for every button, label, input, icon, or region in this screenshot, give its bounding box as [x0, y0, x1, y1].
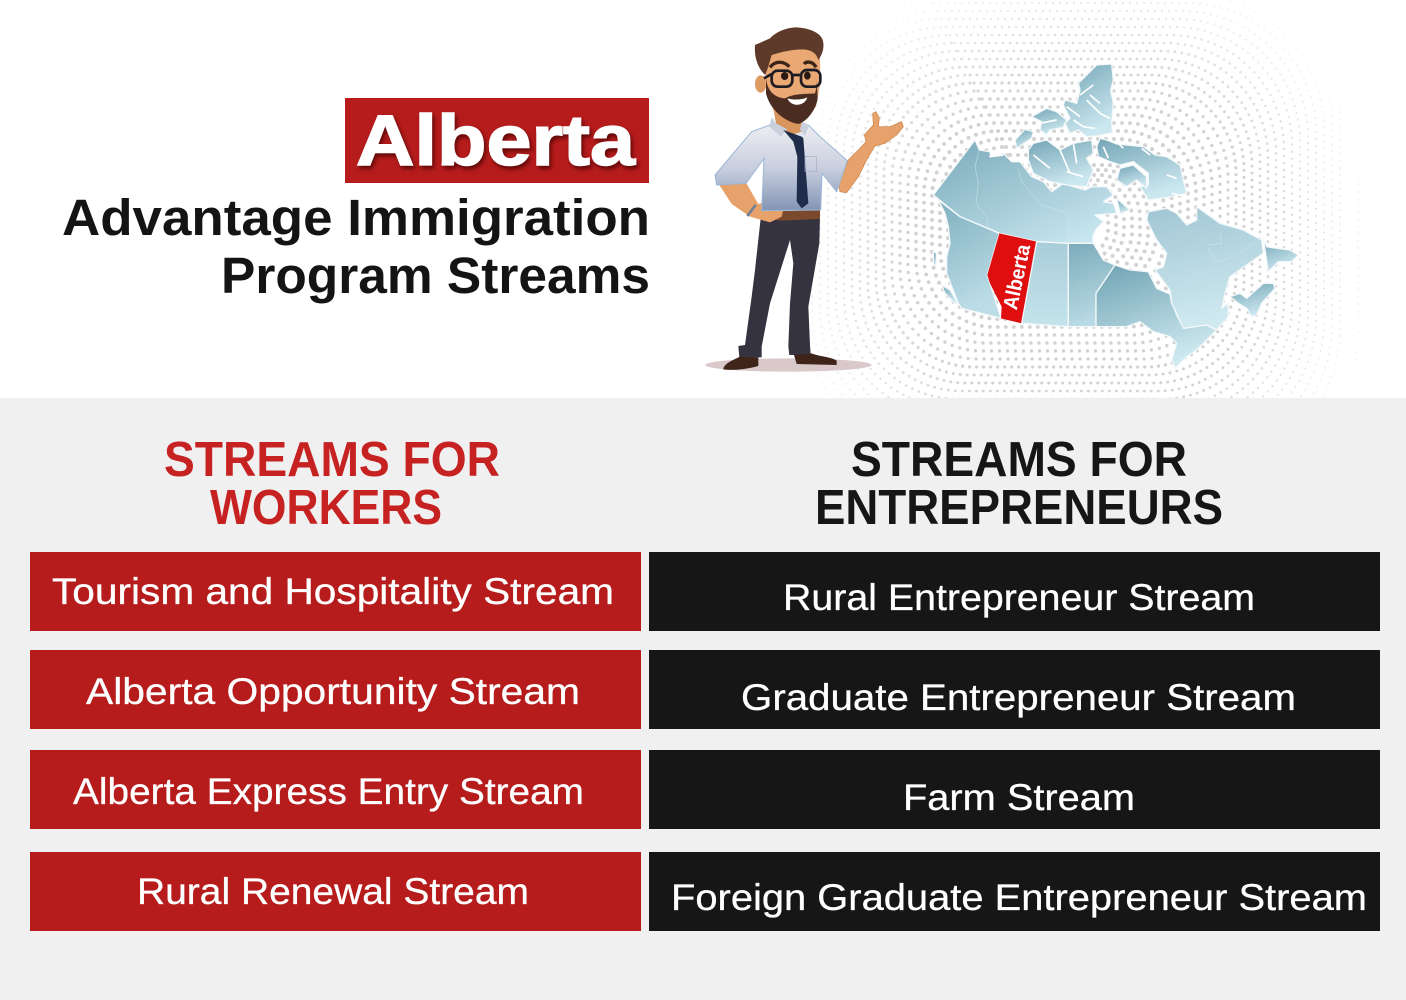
shirt pocket	[805, 157, 817, 172]
halftone dot rings behind the map	[811, 0, 1359, 398]
ear	[755, 75, 766, 93]
row: Alberta Express Entry Stream	[30, 750, 641, 829]
necktie	[783, 130, 808, 208]
row: Alberta Opportunity Stream: Alberta Opportunity Stream	[86, 671, 580, 712]
header background	[0, 0, 1406, 398]
row: Farm Stream	[649, 750, 1380, 829]
beard	[766, 78, 818, 124]
Baffin Island	[1097, 138, 1187, 200]
row: Tourism and Hospitality Stream: Tourism and Hospitality Stream	[52, 571, 614, 612]
row: Graduate Entrepreneur Stream: Graduate Entrepreneur Stream	[741, 677, 1296, 718]
lower grey panel	[0, 398, 1406, 1000]
Melville Peninsula	[1117, 165, 1147, 188]
Manitoba	[1068, 243, 1115, 327]
subtitle line 1: Advantage Immigration	[62, 189, 650, 246]
neck	[773, 108, 802, 135]
eyebrows	[770, 62, 816, 67]
heading: streams for workers	[164, 433, 500, 535]
Banks Island	[1015, 129, 1033, 148]
British Columbia	[938, 200, 1001, 318]
Saskatchewan	[1022, 242, 1068, 327]
bracelet	[747, 205, 756, 216]
column: streams for workers	[30, 433, 641, 931]
left forearm and hand on hip	[719, 183, 784, 222]
column: streams for entrepreneurs	[649, 433, 1380, 931]
row: Alberta Opportunity Stream	[30, 650, 641, 729]
ground shadow	[705, 358, 872, 372]
Alberta province	[987, 233, 1037, 323]
heading: streams for entrepreneurs: ENTREPRENEURS	[815, 481, 1223, 535]
shirt	[715, 125, 847, 211]
eyes	[781, 72, 811, 80]
raised arm and open hand	[838, 112, 903, 193]
smile	[787, 97, 807, 105]
title block	[62, 98, 650, 304]
Ellesmere and northern islands	[1063, 64, 1113, 137]
Vancouver Island	[942, 285, 958, 303]
row: Alberta Express Entry Stream: Alberta Express Entry Stream	[73, 771, 584, 812]
row: Foreign Graduate Entrepreneur Stream	[649, 852, 1380, 931]
row: Rural Renewal Stream: Rural Renewal Stream	[137, 871, 529, 912]
Haida Gwaii	[933, 252, 937, 267]
shoes	[723, 353, 837, 370]
heading: streams for entrepreneurs: STREAMS FOR	[851, 433, 1187, 487]
Alberta map label: Alberta	[999, 242, 1035, 312]
cartoon man presenting the map	[705, 27, 903, 372]
belt	[762, 210, 820, 221]
hair	[755, 27, 823, 75]
row: Tourism and Hospitality Stream	[30, 552, 641, 631]
heading: streams for workers: WORKERS	[210, 481, 442, 535]
territories	[933, 140, 1117, 243]
Southampton Island	[1117, 198, 1130, 213]
row: Graduate Entrepreneur Stream	[649, 650, 1380, 729]
collar	[769, 117, 809, 137]
Maritimes	[1230, 283, 1275, 317]
row: Farm Stream: Farm Stream	[903, 777, 1135, 818]
row: Rural Entrepreneur Stream: Rural Entrepreneur Stream	[783, 577, 1255, 618]
map of Canada with Alberta highlighted	[933, 64, 1298, 368]
heading: streams for entrepreneurs	[815, 433, 1223, 535]
Queen Elizabeth Islands	[1032, 108, 1067, 135]
subtitle line 2: Program Streams	[221, 247, 650, 304]
glasses	[764, 70, 820, 87]
Ontario	[1096, 265, 1217, 368]
Newfoundland	[1263, 238, 1298, 272]
internal borders and channels	[975, 150, 1257, 328]
face	[765, 43, 821, 123]
Victoria and central islands	[1028, 140, 1093, 187]
Quebec and Labrador	[1147, 207, 1263, 330]
row: Foreign Graduate Entrepreneur Stream: Foreign Graduate Entrepreneur Stream	[671, 877, 1367, 918]
row: Rural Entrepreneur Stream	[649, 552, 1380, 631]
heading: streams for workers: STREAMS FOR	[164, 433, 500, 487]
title badge: Alberta: Alberta	[356, 102, 636, 181]
trousers	[738, 217, 820, 357]
row: Rural Renewal Stream	[30, 852, 641, 931]
